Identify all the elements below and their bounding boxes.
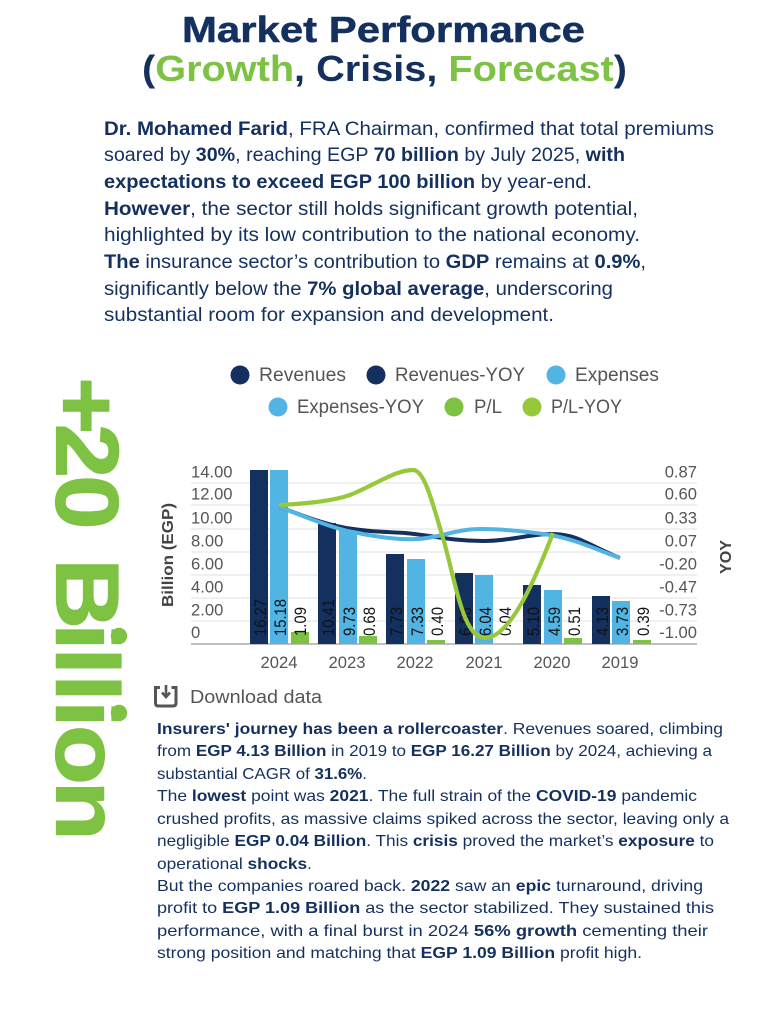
analysis text block: negligible EGP 0.04 Billion . This crisis proved the market’s exposure to bbox=[157, 833, 714, 850]
analysis text block bbox=[157, 721, 729, 962]
intro text block: However , the sector still holds significant growth potential, bbox=[104, 198, 638, 220]
download data label: Download data bbox=[190, 687, 323, 707]
x axis labels: 2022 bbox=[397, 653, 433, 672]
data labels: 15.18 bbox=[271, 599, 290, 636]
right axis labels: -0.73 bbox=[659, 600, 697, 620]
left axis labels: 4.00 bbox=[191, 578, 223, 596]
chart legend: Revenues-YOY bbox=[395, 364, 525, 386]
right axis labels: 0.87 bbox=[665, 462, 697, 482]
chart legend: P/L-YOY bbox=[551, 396, 622, 418]
title bbox=[142, 9, 627, 89]
line: expenses YOY bbox=[280, 507, 620, 558]
left axis labels: 12.00 bbox=[191, 484, 233, 504]
bars: expenses bbox=[270, 470, 630, 644]
data labels: 10.41 bbox=[319, 599, 338, 636]
bars: profit/loss bbox=[291, 632, 651, 644]
data labels: 16.27 bbox=[251, 599, 270, 636]
right axis labels: 0.07 bbox=[665, 532, 697, 550]
title: Market Performance bbox=[182, 9, 585, 50]
left axis labels bbox=[191, 462, 233, 642]
line: revenues YOY bbox=[280, 507, 620, 558]
left axis labels: 8.00 bbox=[191, 532, 223, 550]
analysis text block: But the companies roared back. 2022 saw an epic turnaround, driving bbox=[157, 878, 703, 895]
title: (Growth , Crisis, Forecast ) bbox=[142, 48, 627, 89]
chart legend: Revenues bbox=[259, 364, 346, 386]
bars: revenues bbox=[250, 470, 610, 644]
data labels: 0.04 bbox=[496, 607, 515, 636]
data labels: 0.68 bbox=[360, 607, 379, 636]
left axis labels: 14.00 bbox=[191, 462, 233, 482]
intro text block: highlighted by its low contribution to the national economy. bbox=[104, 224, 640, 246]
data labels: 3.73 bbox=[613, 607, 632, 636]
data labels: 5.10 bbox=[524, 607, 543, 636]
data labels: 4.13 bbox=[593, 607, 612, 636]
chart legend: Expenses-YOY bbox=[297, 396, 424, 418]
vertical callout: +20 Billion: +20 Billion bbox=[37, 377, 137, 841]
analysis text block: Insurers' journey has been a rollercoaster . Revenues soared, climbing bbox=[157, 721, 723, 738]
right axis labels: 0.33 bbox=[665, 508, 697, 528]
data labels bbox=[251, 599, 653, 636]
right axis labels: -1.00 bbox=[659, 623, 697, 642]
data labels: 1.09 bbox=[291, 607, 310, 636]
intro text block: significantly below the 7% global average , underscoring bbox=[104, 278, 613, 300]
data labels: 0.39 bbox=[634, 607, 653, 636]
combo chart bbox=[160, 462, 735, 672]
analysis text block: operational shocks . bbox=[157, 856, 312, 873]
intro text block: expectations to exceed EGP 100 billion by year-end. bbox=[104, 171, 592, 193]
left axis title: Billion (EGP) bbox=[160, 503, 177, 607]
intro text block: soared by 30%, reaching EGP 70 billion by July 2025, with bbox=[104, 144, 625, 166]
right axis labels bbox=[659, 462, 697, 642]
data labels: 6.04 bbox=[476, 607, 495, 636]
analysis text block: crushed profits, as massive claims spiked across the sector, leaving only a bbox=[157, 811, 729, 828]
data labels: 4.59 bbox=[545, 607, 564, 636]
left axis labels: 2.00 bbox=[191, 600, 223, 620]
analysis text block: profit to EGP 1.09 Billion as the sector stabilized. They sustained this bbox=[157, 900, 714, 917]
data labels: 0.51 bbox=[565, 607, 584, 636]
data labels: 7.33 bbox=[408, 607, 427, 636]
right axis labels: -0.20 bbox=[659, 554, 697, 574]
left axis labels: 6.00 bbox=[191, 554, 223, 574]
chart legend bbox=[230, 364, 659, 418]
analysis text block: The lowest point was 2021. The full strain of the COVID-19 pandemic bbox=[157, 788, 697, 805]
intro text block: substantial room for expansion and development. bbox=[104, 304, 554, 326]
intro text block: Dr. Mohamed Farid , FRA Chairman, confirmed that total premiums bbox=[104, 118, 714, 140]
right axis title: YOY bbox=[718, 540, 735, 574]
data labels: 0.40 bbox=[428, 607, 447, 636]
left axis labels: 0 bbox=[191, 623, 200, 642]
analysis text block: performance, with a final burst in 2024 56% growth cementing their bbox=[157, 923, 709, 940]
x axis labels: 2019 bbox=[602, 653, 638, 672]
x axis labels bbox=[261, 653, 638, 672]
line: P/L YOY bbox=[279, 470, 553, 638]
x axis labels: 2023 bbox=[329, 653, 365, 672]
x axis labels: 2021 bbox=[466, 653, 502, 672]
x axis labels: 2020 bbox=[534, 653, 570, 672]
intro text block bbox=[104, 118, 714, 326]
right axis labels: 0.60 bbox=[665, 484, 697, 504]
x axis labels: 2024 bbox=[261, 653, 297, 672]
analysis text block: substantial CAGR of 31.6%. bbox=[157, 766, 367, 783]
right axis labels: -0.47 bbox=[659, 578, 697, 596]
icon: download bbox=[156, 685, 176, 706]
analysis text block: from EGP 4.13 Billion in 2019 to EGP 16.27 Billion by 2024, achieving a bbox=[157, 743, 712, 760]
data labels: 6.08 bbox=[456, 607, 475, 636]
chart legend: P/L bbox=[474, 396, 502, 418]
chart legend: Expenses bbox=[575, 364, 659, 386]
analysis text block: strong position and matching that EGP 1.09 Billion profit high. bbox=[157, 945, 642, 962]
data labels: 9.73 bbox=[340, 607, 359, 636]
left axis labels: 10.00 bbox=[191, 508, 233, 528]
data labels: 7.73 bbox=[387, 607, 406, 636]
intro text block: The insurance sector’s contribution to GDP remains at 0.9%, bbox=[104, 251, 646, 273]
